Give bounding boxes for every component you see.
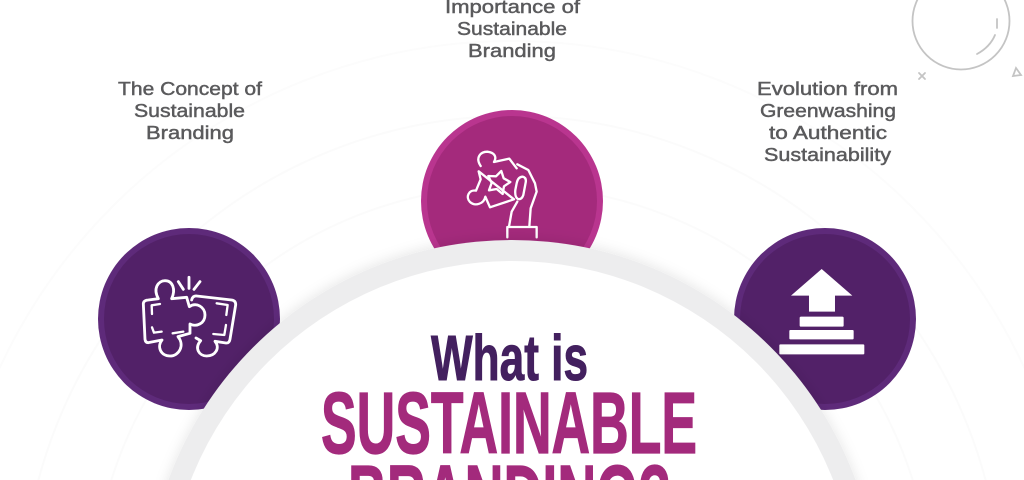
label: Evolution from Greenwashing to Authentic Sustainability bbox=[757, 78, 898, 165]
label: Importance of Sustainable Branding bbox=[445, 0, 581, 61]
label: The Concept of Sustainable Branding: The Concept of bbox=[118, 78, 263, 99]
label: Evolution from Greenwashing to Authentic Sustainability: Evolution from bbox=[757, 78, 898, 99]
label: Evolution from Greenwashing to Authentic Sustainability: to Authentic bbox=[769, 122, 887, 143]
title bbox=[321, 322, 697, 480]
label: Evolution from Greenwashing to Authentic Sustainability: Greenwashing bbox=[760, 100, 896, 121]
icon: arrow up over stacked steps bbox=[779, 269, 864, 354]
label: The Concept of Sustainable Branding bbox=[118, 78, 263, 143]
badge: left purple circle bbox=[98, 228, 280, 410]
label: Importance of Sustainable Branding: Sustainable bbox=[457, 18, 567, 39]
label: The Concept of Sustainable Branding: Sustainable bbox=[134, 100, 245, 121]
decoration: top-right outlined circle and marks bbox=[912, 0, 1021, 79]
label: Importance of Sustainable Branding: Branding bbox=[468, 40, 556, 61]
label: The Concept of Sustainable Branding: Branding bbox=[146, 122, 234, 143]
badge: right purple circle bbox=[734, 228, 916, 410]
central white disc bbox=[167, 261, 857, 480]
icon: joined puzzle pieces bbox=[143, 277, 236, 356]
badge: centre magenta circle bbox=[421, 110, 603, 292]
central grey ring bbox=[146, 240, 878, 480]
title: What is bbox=[431, 322, 588, 394]
icon: hand holding puzzle piece with star bbox=[468, 152, 537, 237]
title: SUSTAINABLE bbox=[321, 375, 697, 472]
label: Evolution from Greenwashing to Authentic Sustainability: Sustainability bbox=[764, 144, 892, 165]
